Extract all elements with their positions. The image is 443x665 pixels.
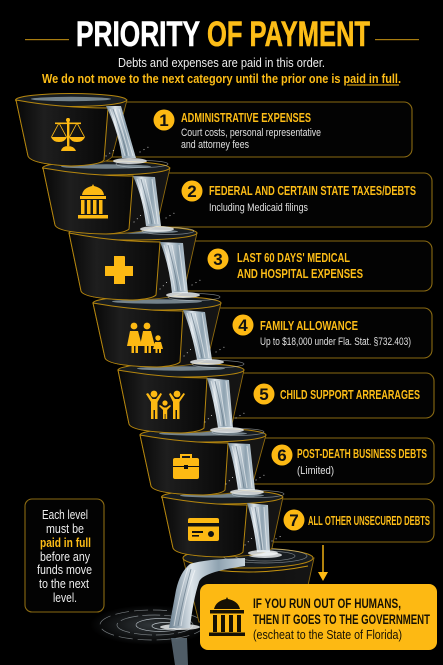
note: each level must be paid in full: level. [53, 591, 77, 605]
bucket 3 [69, 226, 197, 300]
panel: level 1: Court costs, personal representative [181, 127, 321, 139]
icon: family with raised arms [146, 391, 185, 419]
icon: medical cross [105, 256, 133, 284]
waterfall 1 [106, 106, 168, 168]
pond ripples [90, 605, 210, 645]
note: each level must be paid in full: paid in full [40, 536, 91, 550]
panel: level 1 [100, 102, 412, 157]
bucket 6 [140, 428, 266, 495]
note: each level must be paid in full: funds move [37, 563, 92, 577]
waterfall 6 [226, 443, 284, 498]
arrow to government box [318, 545, 328, 581]
panel: level 2: 2 [187, 182, 197, 201]
panel: level 4 [190, 308, 432, 358]
icon: credit card [188, 518, 219, 541]
panel: level 4: FAMILY ALLOWANCE [260, 319, 358, 333]
panel: level 6: 6 [277, 446, 287, 465]
waterfall 4 [183, 310, 244, 368]
bucket 7 [162, 490, 283, 557]
panel: level 2 [130, 173, 432, 227]
water stream to pond [169, 558, 245, 665]
waterfall 5 [205, 378, 264, 436]
panel: level 1: and attorney fees [181, 139, 249, 151]
title: PRIORITY [76, 15, 200, 54]
panel: level 6: (Limited) [297, 465, 334, 477]
callout: government escheat [200, 584, 437, 650]
subtitle: Debts and expenses are paid in this order. [118, 55, 325, 70]
panel: level 1: ADMINISTRATIVE EXPENSES [181, 111, 311, 125]
icon: courthouse [78, 184, 108, 218]
icon: briefcase [173, 454, 199, 479]
note: each level must be paid in full: Each level [42, 508, 88, 522]
waterfall 7 [245, 503, 283, 556]
panel: level 5: 5 [259, 385, 269, 404]
note: each level must be paid in full: to the next [39, 577, 89, 591]
bucket 2 [42, 161, 170, 234]
panel: level 7: 7 [289, 511, 299, 530]
bucket 5 [118, 363, 244, 433]
panel: level 2: Including Medicaid filings [209, 202, 308, 214]
note: each level must be paid in full: before any [40, 550, 91, 564]
icon: government building [209, 597, 245, 636]
bucket 4 [93, 296, 221, 367]
note: each level must be paid in full: must be [46, 522, 84, 536]
panel: level 5 [215, 373, 434, 418]
callout: government escheat: (escheat to the State of Florida) [253, 628, 402, 642]
panel: level 3: LAST 60 DAYS' MEDICAL [237, 251, 350, 265]
waterfall 2 [133, 176, 194, 234]
subtitle [42, 55, 401, 86]
icon: family [127, 323, 163, 353]
bucket 1 [16, 94, 127, 166]
waterfall 3 [160, 242, 220, 300]
panel: level 1: 1 [159, 111, 169, 130]
panel: level 3: 3 [213, 250, 223, 269]
panel: level 4: 4 [238, 316, 248, 335]
panel: level 6 [235, 438, 434, 484]
panel: level 3: AND HOSPITAL EXPENSES [237, 267, 363, 281]
icon: scales of justice [51, 118, 85, 151]
note: each level must be paid in full [25, 499, 104, 612]
title: OF PAYMENT [207, 15, 370, 54]
panel: level 3 [160, 241, 432, 291]
title [25, 15, 419, 54]
bucket 8 (bottom basin) [183, 548, 314, 622]
panel: level 7 [250, 499, 434, 542]
